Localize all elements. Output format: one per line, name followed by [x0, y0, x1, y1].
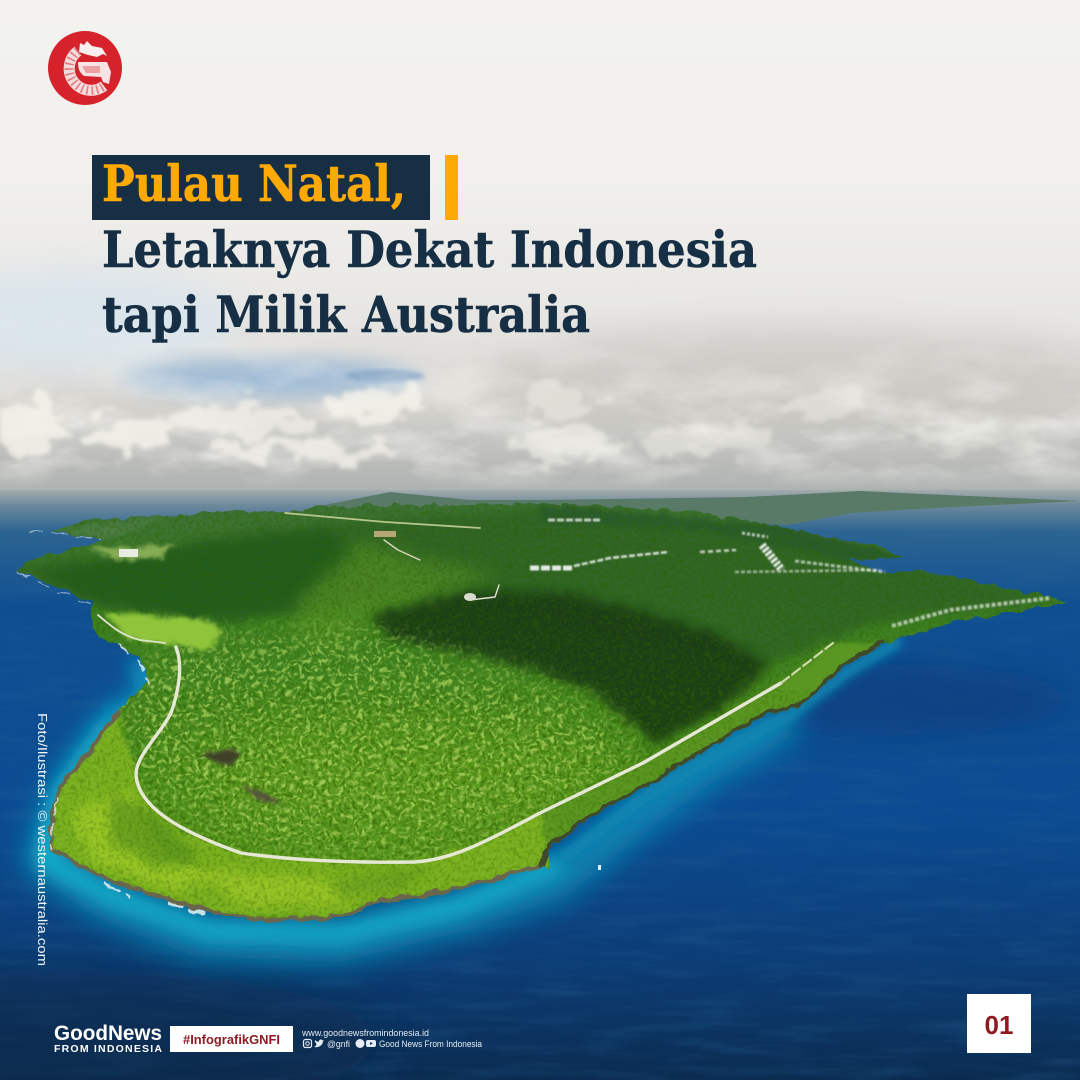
deep water at bottom-left	[0, 970, 380, 1080]
golf course clearing	[103, 612, 220, 652]
hashtag label: #InfografikGNFI	[183, 1032, 280, 1047]
bright cumulus band	[0, 387, 1040, 460]
GoodNews From Indonesia wordmark	[54, 1022, 162, 1055]
rock outcrops	[198, 750, 240, 765]
GoodNews From Indonesia wordmark: FROM INDONESIA	[54, 1043, 162, 1055]
title	[92, 154, 757, 344]
footer	[54, 994, 1031, 1055]
title line three: tapi Milik Australia	[102, 285, 590, 344]
page number box: 01	[985, 1010, 1013, 1040]
coastal vegetation, south-east	[540, 643, 885, 868]
photo background: ocean	[0, 490, 1080, 1080]
rocky shoreline	[48, 710, 540, 922]
pale blue haze at left	[0, 270, 240, 370]
dark patch at right	[730, 665, 1070, 735]
boat	[598, 865, 601, 870]
top clearing	[88, 545, 175, 560]
photo credit: Foto/Ilustrasi : © westernaustralia.com	[35, 713, 50, 966]
dragon head	[79, 41, 107, 57]
island: main landform	[0, 490, 1080, 930]
website and social handles	[301, 1028, 482, 1049]
lit green ridge	[290, 540, 500, 650]
icon: instagram	[304, 1040, 312, 1048]
bright lower hillside	[180, 710, 620, 830]
letter G bar	[78, 62, 111, 84]
icon: twitter	[314, 1039, 324, 1047]
website and social handles: @gnfi	[327, 1039, 350, 1049]
title highlight box	[92, 155, 430, 220]
GoodNews From Indonesia wordmark: GoodNews	[54, 1022, 162, 1045]
vegetation grain	[0, 490, 1080, 930]
photo background: sky and clouds	[0, 0, 1080, 510]
icon: youtube	[366, 1040, 376, 1047]
grey cloud mass at right	[480, 325, 1080, 435]
title line one: Pulau Natal,	[102, 154, 406, 213]
cloud shadow on hillside	[372, 592, 770, 745]
title line two: Letaknya Dekat Indonesia	[102, 220, 757, 279]
page number box	[967, 994, 1031, 1053]
upper forest, darker	[0, 510, 1060, 665]
hashtag label	[170, 1026, 293, 1052]
clearings	[119, 531, 476, 601]
logo: GNFI garuda emblem	[48, 31, 122, 105]
dragon ring body	[69, 51, 104, 90]
website and social handles: www.goodnewsfromindonesia.id	[301, 1028, 429, 1039]
settlements	[530, 520, 1050, 626]
icon: facebook	[356, 1039, 364, 1048]
far left tongue, hazy	[60, 516, 160, 540]
orange accent bar	[445, 155, 458, 220]
turquoise reef shallows	[42, 640, 900, 945]
distant headland	[300, 491, 1080, 525]
coastal road	[98, 513, 833, 862]
website and social handles: Good News From Indonesia	[379, 1039, 482, 1049]
bright coastal vegetation, south-west	[48, 710, 560, 918]
blue sky gap	[120, 358, 420, 398]
surf line	[16, 532, 202, 913]
